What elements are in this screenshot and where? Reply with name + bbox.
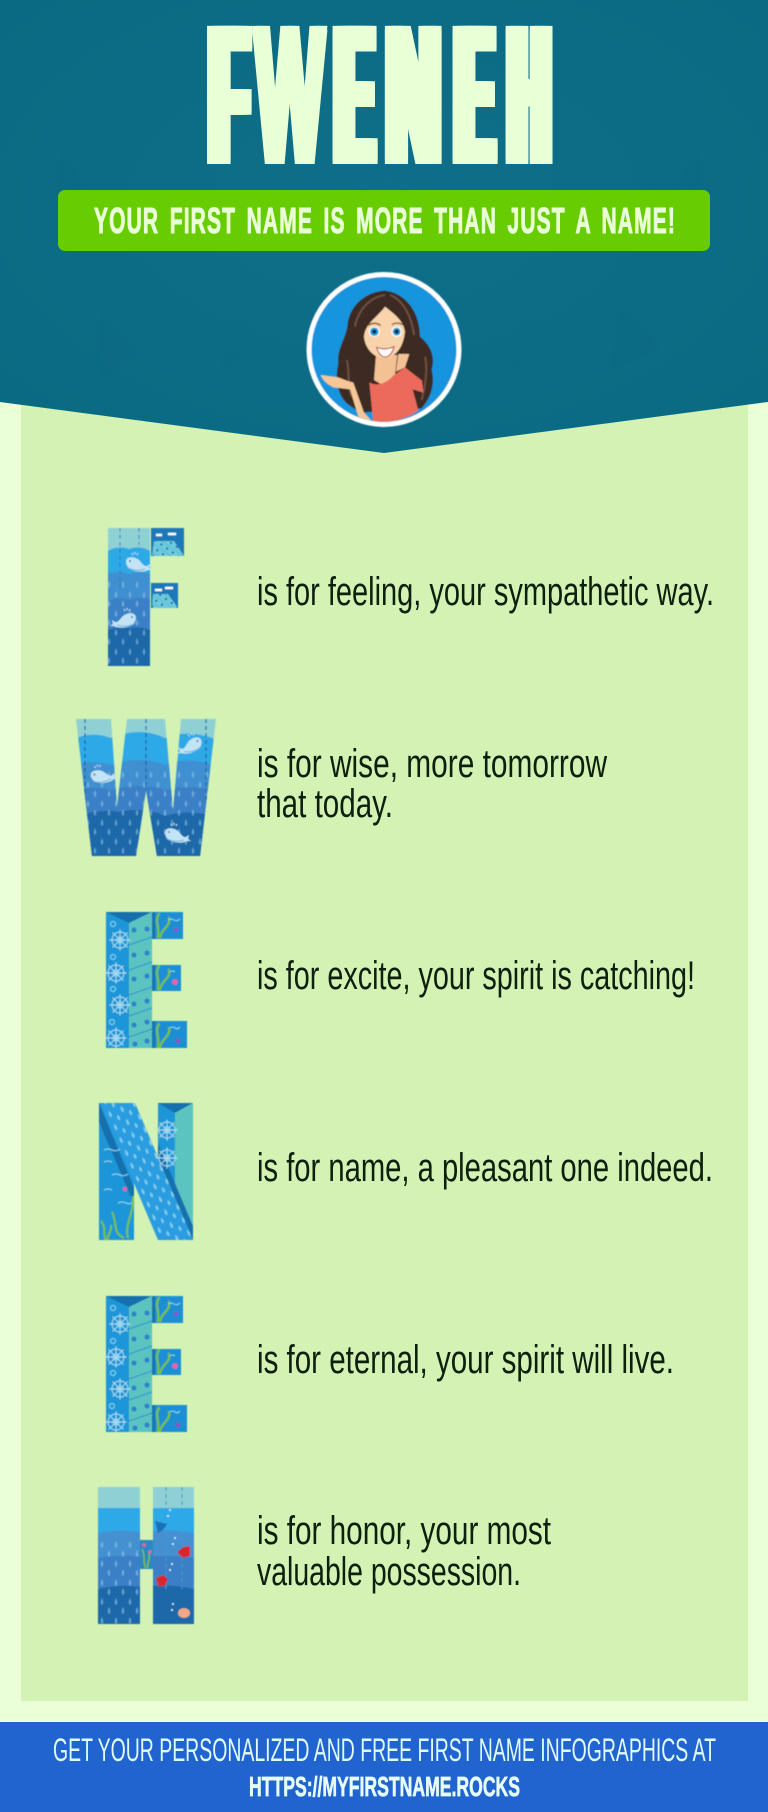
footer url: HTTPS://MYFIRSTNAME.ROCKS [249, 1771, 520, 1802]
arm and hand [321, 375, 373, 423]
avatar: woman in circle [309, 274, 459, 424]
shirt [369, 367, 423, 423]
hair [337, 291, 433, 413]
text: W lines: is for wise, more tomorrow [257, 742, 607, 786]
text: H lines [257, 1509, 551, 1594]
letter icon: F [108, 528, 184, 666]
text: H lines: is for honor, your most [257, 1509, 551, 1553]
title: FWENEH [203, 0, 552, 202]
face [364, 307, 405, 358]
text: W lines: that today. [257, 782, 393, 826]
mouth [377, 347, 394, 357]
footer band [0, 1722, 768, 1812]
letter icon: N [99, 1103, 193, 1240]
neck [374, 355, 397, 386]
header: teal chevron banner [0, 0, 768, 453]
letter icon: W [70, 719, 220, 860]
letter icon: H [98, 1487, 194, 1624]
text: H lines: valuable possession. [257, 1550, 521, 1594]
letter icon: E [106, 912, 187, 1048]
eyes [369, 326, 380, 337]
tagline banner [58, 190, 710, 251]
panel: light green content area [21, 395, 748, 1701]
letter icon: E (second) [106, 1296, 187, 1432]
text: W lines [257, 742, 607, 826]
